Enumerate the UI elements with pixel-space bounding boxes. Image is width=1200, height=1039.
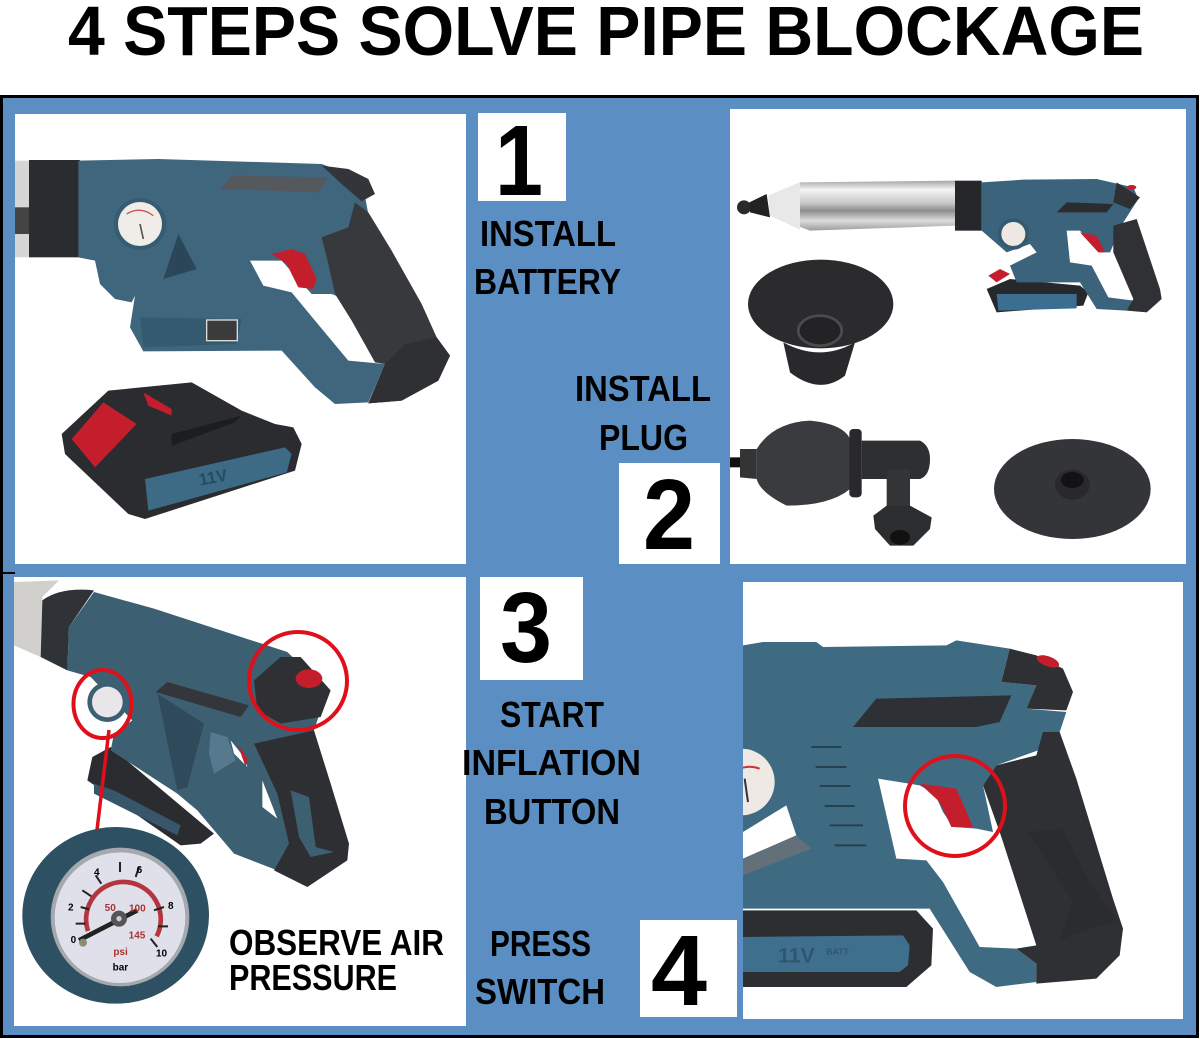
step 3 label: BUTTON bbox=[484, 791, 620, 832]
step 1 label: BATTERY bbox=[474, 261, 621, 302]
text: observe air pressure: OBSERVE AIR bbox=[229, 922, 444, 963]
step number 2 bbox=[619, 459, 720, 571]
icon: enlarged pressure gauge: 100 bbox=[129, 903, 146, 914]
step 3 label: START bbox=[500, 694, 604, 735]
image: pump with battery removed: 11V bbox=[197, 465, 229, 490]
step 4 label: SWITCH bbox=[475, 971, 605, 1012]
step 1 label: INSTALL bbox=[480, 213, 616, 254]
image: pump with battery removed bbox=[15, 159, 450, 519]
icon: enlarged pressure gauge: 6 bbox=[137, 865, 143, 876]
icon: enlarged pressure gauge: 145 bbox=[129, 930, 146, 941]
callout: gauge circle bbox=[74, 670, 132, 738]
panel: step 2 install plug bbox=[730, 109, 1186, 564]
text: observe air pressure: PRESSURE bbox=[229, 957, 397, 998]
icon: enlarged pressure gauge: 50 bbox=[105, 903, 116, 914]
icon: enlarged pressure gauge: psi bbox=[113, 947, 128, 958]
step number 1: 1 bbox=[495, 105, 543, 217]
callout: trigger circle bbox=[905, 756, 1005, 856]
step number 3: 3 bbox=[500, 572, 552, 684]
panel: step 1 install battery bbox=[15, 114, 466, 564]
step 3 label: INFLATION bbox=[462, 742, 641, 783]
step 2 label bbox=[575, 368, 711, 458]
step 4 label bbox=[475, 923, 605, 1012]
step number 1 bbox=[478, 105, 566, 217]
image: angled pump bbox=[14, 580, 349, 887]
callout: button circle bbox=[249, 632, 347, 730]
icon: enlarged pressure gauge bbox=[22, 827, 209, 1004]
step number 2: 2 bbox=[643, 459, 695, 571]
step number 4 bbox=[640, 915, 737, 1027]
step 3 label bbox=[462, 694, 641, 832]
image: pump close up bbox=[743, 640, 1123, 987]
step 2 label: PLUG bbox=[599, 417, 688, 458]
image: pump and three plugs bbox=[730, 179, 1162, 546]
text: observe air pressure bbox=[229, 922, 444, 998]
image: pump close up: 11V bbox=[778, 944, 816, 968]
icon: enlarged pressure gauge: 10 bbox=[156, 948, 168, 959]
image: pump close up: BATT bbox=[826, 947, 849, 957]
panel: step 4 press switch bbox=[700, 582, 1183, 1019]
step 1 label bbox=[474, 213, 621, 302]
icon: enlarged pressure gauge: 0 bbox=[71, 935, 77, 946]
step number 3 bbox=[480, 572, 583, 684]
icon: enlarged pressure gauge: bar bbox=[113, 963, 128, 974]
step number 4: 4 bbox=[651, 915, 707, 1027]
arrow: gauge connector bbox=[97, 730, 109, 830]
icon: enlarged pressure gauge: 8 bbox=[168, 901, 174, 912]
icon: enlarged pressure gauge: 2 bbox=[68, 902, 74, 913]
icon: enlarged pressure gauge: 4 bbox=[94, 868, 100, 879]
panel: step 3 start inflation bbox=[14, 577, 466, 1026]
step 2 label: INSTALL bbox=[575, 368, 711, 409]
step 4 label: PRESS bbox=[490, 923, 591, 964]
